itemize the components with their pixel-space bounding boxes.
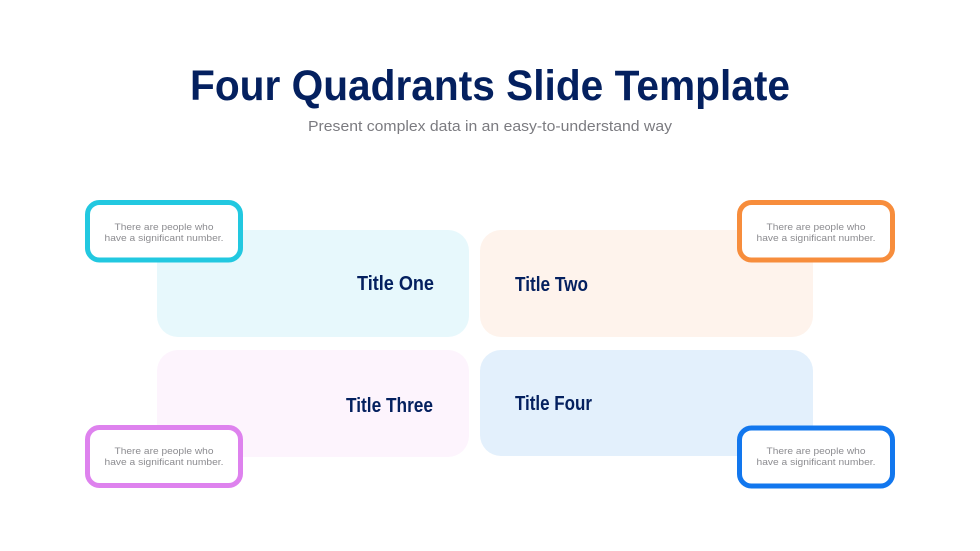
- panel: title three: [157, 350, 469, 457]
- callout: blue: have a significant number.: [756, 457, 876, 468]
- heading: title one: Title One: [357, 273, 434, 295]
- callout: orange: There are people who: [766, 222, 866, 233]
- heading: title three: Title Three: [346, 395, 433, 417]
- callout: cyan: [88, 202, 240, 260]
- heading: title two: Title Two: [515, 274, 588, 296]
- panel: title one: [157, 230, 469, 337]
- callout: orange: have a significant number.: [756, 233, 876, 244]
- panel: title two: [480, 230, 813, 337]
- title: Four Quadrants Slide Template: [190, 62, 790, 110]
- heading: title four: Title Four: [515, 393, 592, 415]
- callout: orange: [740, 202, 892, 260]
- callout: purple: There are people who: [114, 446, 214, 457]
- callout: cyan: have a significant number.: [104, 233, 224, 244]
- callout: purple: [88, 428, 240, 486]
- callout: purple: have a significant number.: [104, 457, 224, 468]
- callout: cyan: There are people who: [114, 222, 214, 233]
- panel: title four: [480, 350, 813, 456]
- subtitle: Present complex data in an easy-to-understand way: [308, 118, 673, 135]
- callout: blue: There are people who: [766, 446, 866, 457]
- callout: blue: [740, 428, 892, 486]
